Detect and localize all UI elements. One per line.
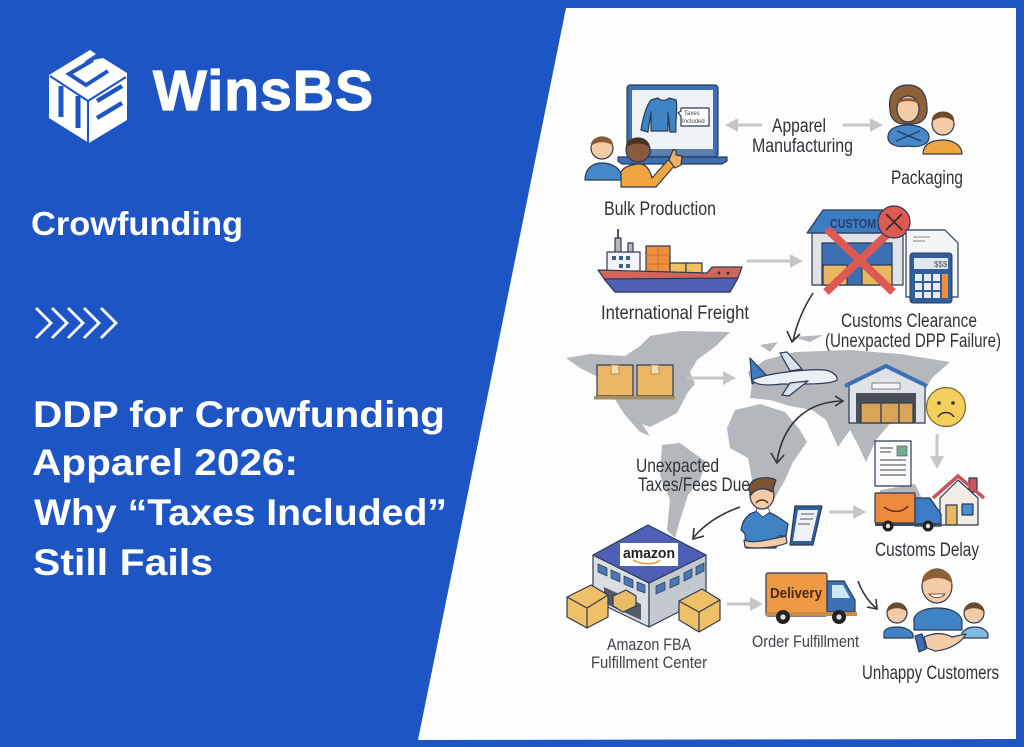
speech bubble: Included [682, 119, 705, 125]
icon: amazon fulfillment center: amazon [623, 545, 675, 562]
icon: customs building crossed out [807, 206, 910, 292]
category label: Crowfunding [31, 205, 243, 242]
label: customs clearance: Customs Clearance [841, 311, 977, 332]
title: DDP for Crowfunding [33, 394, 445, 435]
icon: unhappy customers group [884, 569, 988, 652]
title: Why “Taxes Included” [34, 492, 447, 533]
label: bulk production: Bulk Production [604, 199, 716, 220]
icon: box right [679, 589, 720, 632]
arrow: customs to map [787, 293, 813, 342]
arrow: amazon to delivery [727, 597, 763, 611]
icon: customs document and calculator: $$$ [934, 260, 948, 269]
icon: warehouse [845, 366, 927, 423]
icon: laptop with taxes included [618, 85, 727, 164]
icon: man with tablet [741, 478, 822, 548]
icon: packaging people [888, 85, 962, 154]
label: customs clearance [825, 311, 1001, 352]
icon: box left [567, 585, 608, 628]
panel: white diagram panel [418, 8, 1016, 740]
icon: two people at laptop [585, 137, 682, 187]
icon: customs document and calculator [906, 230, 958, 303]
arrow: left from apparel manufacturing [725, 118, 762, 132]
title: Still Fails [33, 542, 213, 583]
icon: delivery truck: Delivery [770, 585, 823, 602]
icon: customs building crossed out: CUSTOM [830, 216, 876, 231]
icon: chevrons [36, 308, 116, 338]
arrow: pallet to plane [687, 371, 736, 385]
label: packaging: Packaging [891, 168, 963, 189]
arrow: freight to customs [747, 254, 803, 268]
icon: invoice document [875, 441, 911, 486]
icon: amazon truck [875, 493, 941, 532]
arrow: delivery to customers [858, 581, 877, 609]
label: amazon fba: Amazon FBA [607, 636, 691, 654]
icon: cube logo [49, 50, 127, 143]
label: order fulfillment: Order Fulfillment [752, 633, 859, 651]
label: amazon fba [591, 636, 707, 672]
icon: house [933, 476, 984, 525]
speech bubble: Taxes [684, 111, 700, 117]
icon: airplane [750, 352, 837, 396]
icon: sad face [926, 388, 966, 426]
arrow: warehouse down to delivery [930, 434, 944, 469]
label: apparel manufacturing [752, 116, 853, 157]
icon: delivery truck [766, 573, 857, 624]
title: Apparel 2026: [32, 442, 298, 483]
arrow: man to truck [829, 505, 866, 519]
label: unexpected taxes: Unexpacted [636, 456, 719, 477]
wordmark: WinsBS [153, 59, 373, 123]
speech bubble [678, 108, 709, 126]
icon: boxes on pallet [594, 365, 675, 400]
icon: amazon fulfillment center [593, 525, 706, 627]
world map [566, 331, 950, 538]
title [32, 394, 447, 583]
logo: WinsBS cube and wordmark [49, 50, 373, 143]
label: apparel manufacturing: Apparel [772, 116, 826, 137]
icon: cargo ship [598, 229, 742, 292]
arrow: curved double arrow warehouse to map [771, 396, 843, 463]
arrow: right to packaging [843, 118, 883, 132]
label: amazon fba: Fulfillment Center [591, 654, 707, 672]
label: unexpected taxes [636, 456, 750, 496]
arrow: man to amazon [693, 507, 740, 539]
label: customs delay: Customs Delay [875, 540, 979, 561]
label: unexpected taxes: Taxes/Fees Due [638, 475, 750, 496]
label: apparel manufacturing: Manufacturing [752, 136, 853, 157]
label: international freight: International Freight [601, 303, 750, 324]
icon: sweater [641, 98, 677, 132]
